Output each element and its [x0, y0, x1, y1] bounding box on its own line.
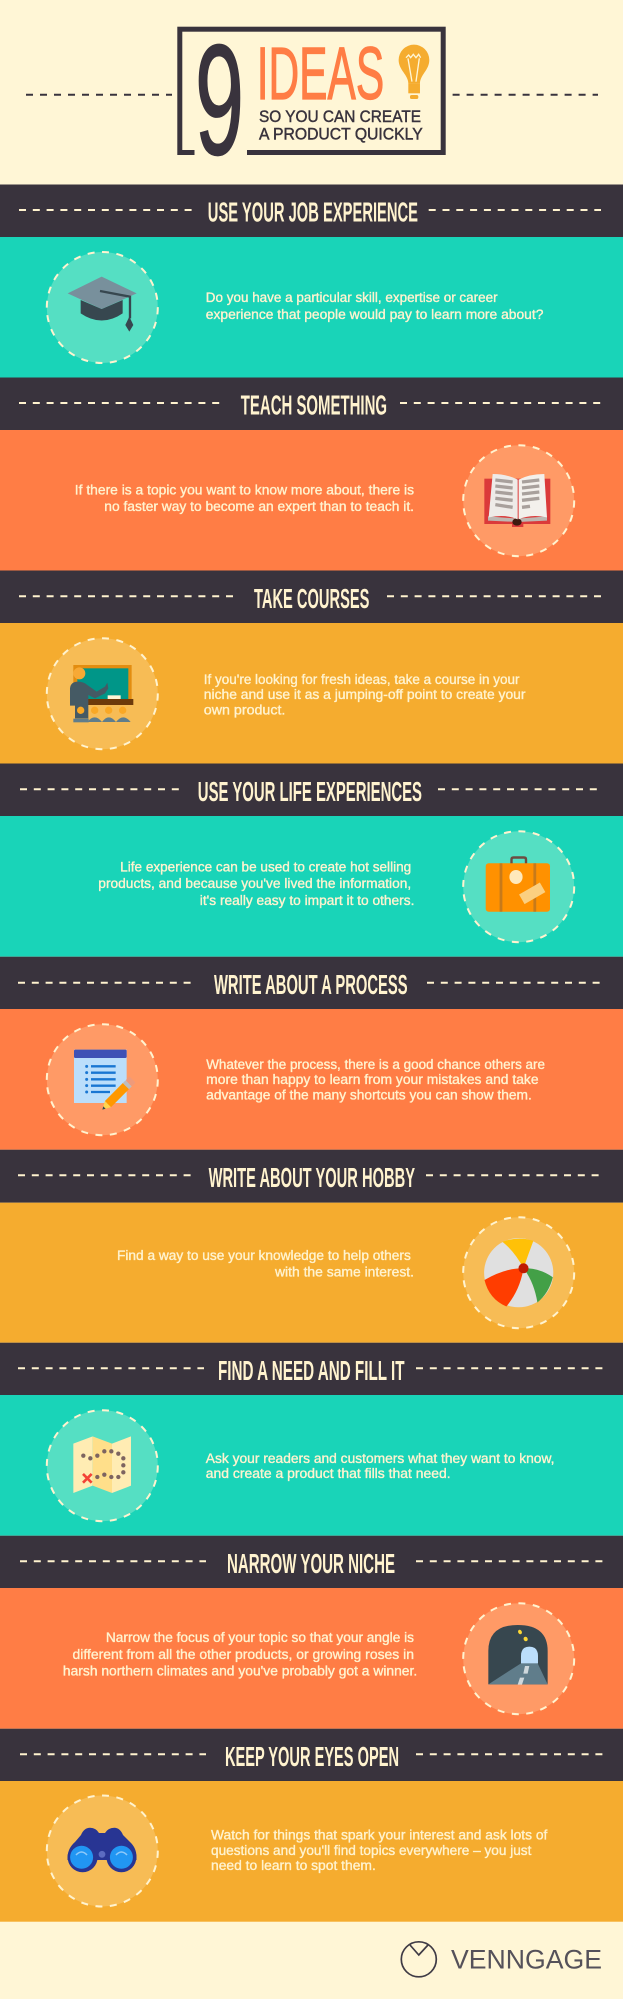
- body text: [63, 1630, 417, 1678]
- icon: suitcase: [463, 831, 574, 942]
- body text: [206, 1451, 555, 1481]
- body text: Find a way to use your knowledge to help others: [117, 1248, 411, 1263]
- icon: binoculars: [47, 1796, 158, 1906]
- body text: harsh northern climates and you've probably got a winner.: [63, 1664, 417, 1678]
- body text: need to learn to spot them.: [211, 1858, 376, 1873]
- heading: WRITE ABOUT YOUR HOBBY: [209, 1162, 415, 1193]
- heading: TEACH SOMETHING: [241, 390, 387, 421]
- panel: teach something: [0, 378, 623, 570]
- icon: road tunnel: [463, 1603, 574, 1714]
- body text: more than happy to learn from your mistakes and take: [206, 1072, 539, 1087]
- body text: Life experience can be used to create hot selling: [120, 860, 411, 874]
- heading: NARROW YOUR NICHE: [227, 1548, 395, 1579]
- wordmark: VENNGAGE: [451, 1944, 602, 1974]
- body text: If you're looking for fresh ideas, take a course in your: [204, 672, 520, 687]
- body text: experience that people would pay to learn more about?: [206, 307, 543, 322]
- body text: [211, 1828, 548, 1873]
- body text: Watch for things that spark your interest and ask lots of: [211, 1828, 548, 1842]
- heading: KEEP YOUR EYES OPEN: [225, 1741, 399, 1772]
- panel: use your life experiences: [0, 764, 623, 957]
- panel: write about your hobby: [0, 1150, 623, 1343]
- heading: TAKE COURSES: [254, 583, 369, 614]
- body text: products, and because you've lived the information,: [98, 876, 411, 891]
- panel: narrow your niche: [0, 1536, 623, 1729]
- body text: it's really easy to impart it to others.: [200, 893, 414, 908]
- icon: venngage mark: [401, 1942, 436, 1977]
- body text: niche and use it as a jumping-off point to create your: [204, 687, 526, 702]
- icon: graduation cap: [47, 252, 158, 363]
- panel: write about a process: [0, 957, 623, 1150]
- body text: [204, 672, 526, 718]
- heading: USE YOUR LIFE EXPERIENCES: [198, 776, 422, 807]
- icon: teacher at blackboard: [47, 638, 158, 749]
- body text: Ask your readers and customers what they want to know,: [206, 1451, 555, 1466]
- body text: [117, 1248, 414, 1280]
- body text: [206, 290, 543, 322]
- body text: [98, 860, 414, 908]
- body text: Whatever the process, there is a good chance others are: [206, 1057, 545, 1072]
- body text: [75, 482, 414, 514]
- heading: FIND A NEED AND FILL IT: [218, 1355, 404, 1386]
- body text: If there is a topic you want to know more about, there is: [75, 482, 414, 498]
- footer logo: [401, 1942, 602, 1977]
- body text: questions and you'll find topics everywhere – you just: [211, 1843, 532, 1858]
- big number nine: 9: [195, 13, 244, 188]
- panel: find a need and fill it: [0, 1343, 623, 1536]
- body text: no faster way to become an expert than to teach it.: [104, 499, 414, 514]
- title word ideas: IDEAS: [257, 32, 384, 115]
- body text: Narrow the focus of your topic so that your angle is: [106, 1630, 414, 1645]
- body text: different from all the other products, or growing roses in: [72, 1647, 414, 1662]
- icon: beach ball: [463, 1217, 574, 1328]
- subtitle: A PRODUCT QUICKLY: [259, 126, 423, 144]
- heading: USE YOUR JOB EXPERIENCE: [208, 196, 418, 228]
- subtitle: SO YOU CAN CREATE: [259, 108, 421, 126]
- panel: keep your eyes open: [0, 1729, 623, 1922]
- body text: [206, 1057, 545, 1102]
- body text: advantage of the many shortcuts you can show them.: [206, 1088, 532, 1102]
- icon: open book: [463, 445, 574, 556]
- body text: and create a product that fills that need.: [206, 1466, 451, 1481]
- icon: light bulb: [399, 45, 429, 99]
- icon: treasure map: [47, 1410, 158, 1521]
- icon: notepad and pencil: [47, 1024, 158, 1135]
- body text: own product.: [204, 702, 285, 718]
- body text: Do you have a particular skill, expertise or career: [206, 290, 498, 305]
- body text: with the same interest.: [274, 1264, 414, 1280]
- heading: WRITE ABOUT A PROCESS: [214, 969, 408, 1000]
- panel: take courses: [0, 570, 623, 764]
- subtitle: [259, 108, 423, 144]
- title block: [26, 13, 598, 188]
- panel: use your job experience: [0, 184, 623, 378]
